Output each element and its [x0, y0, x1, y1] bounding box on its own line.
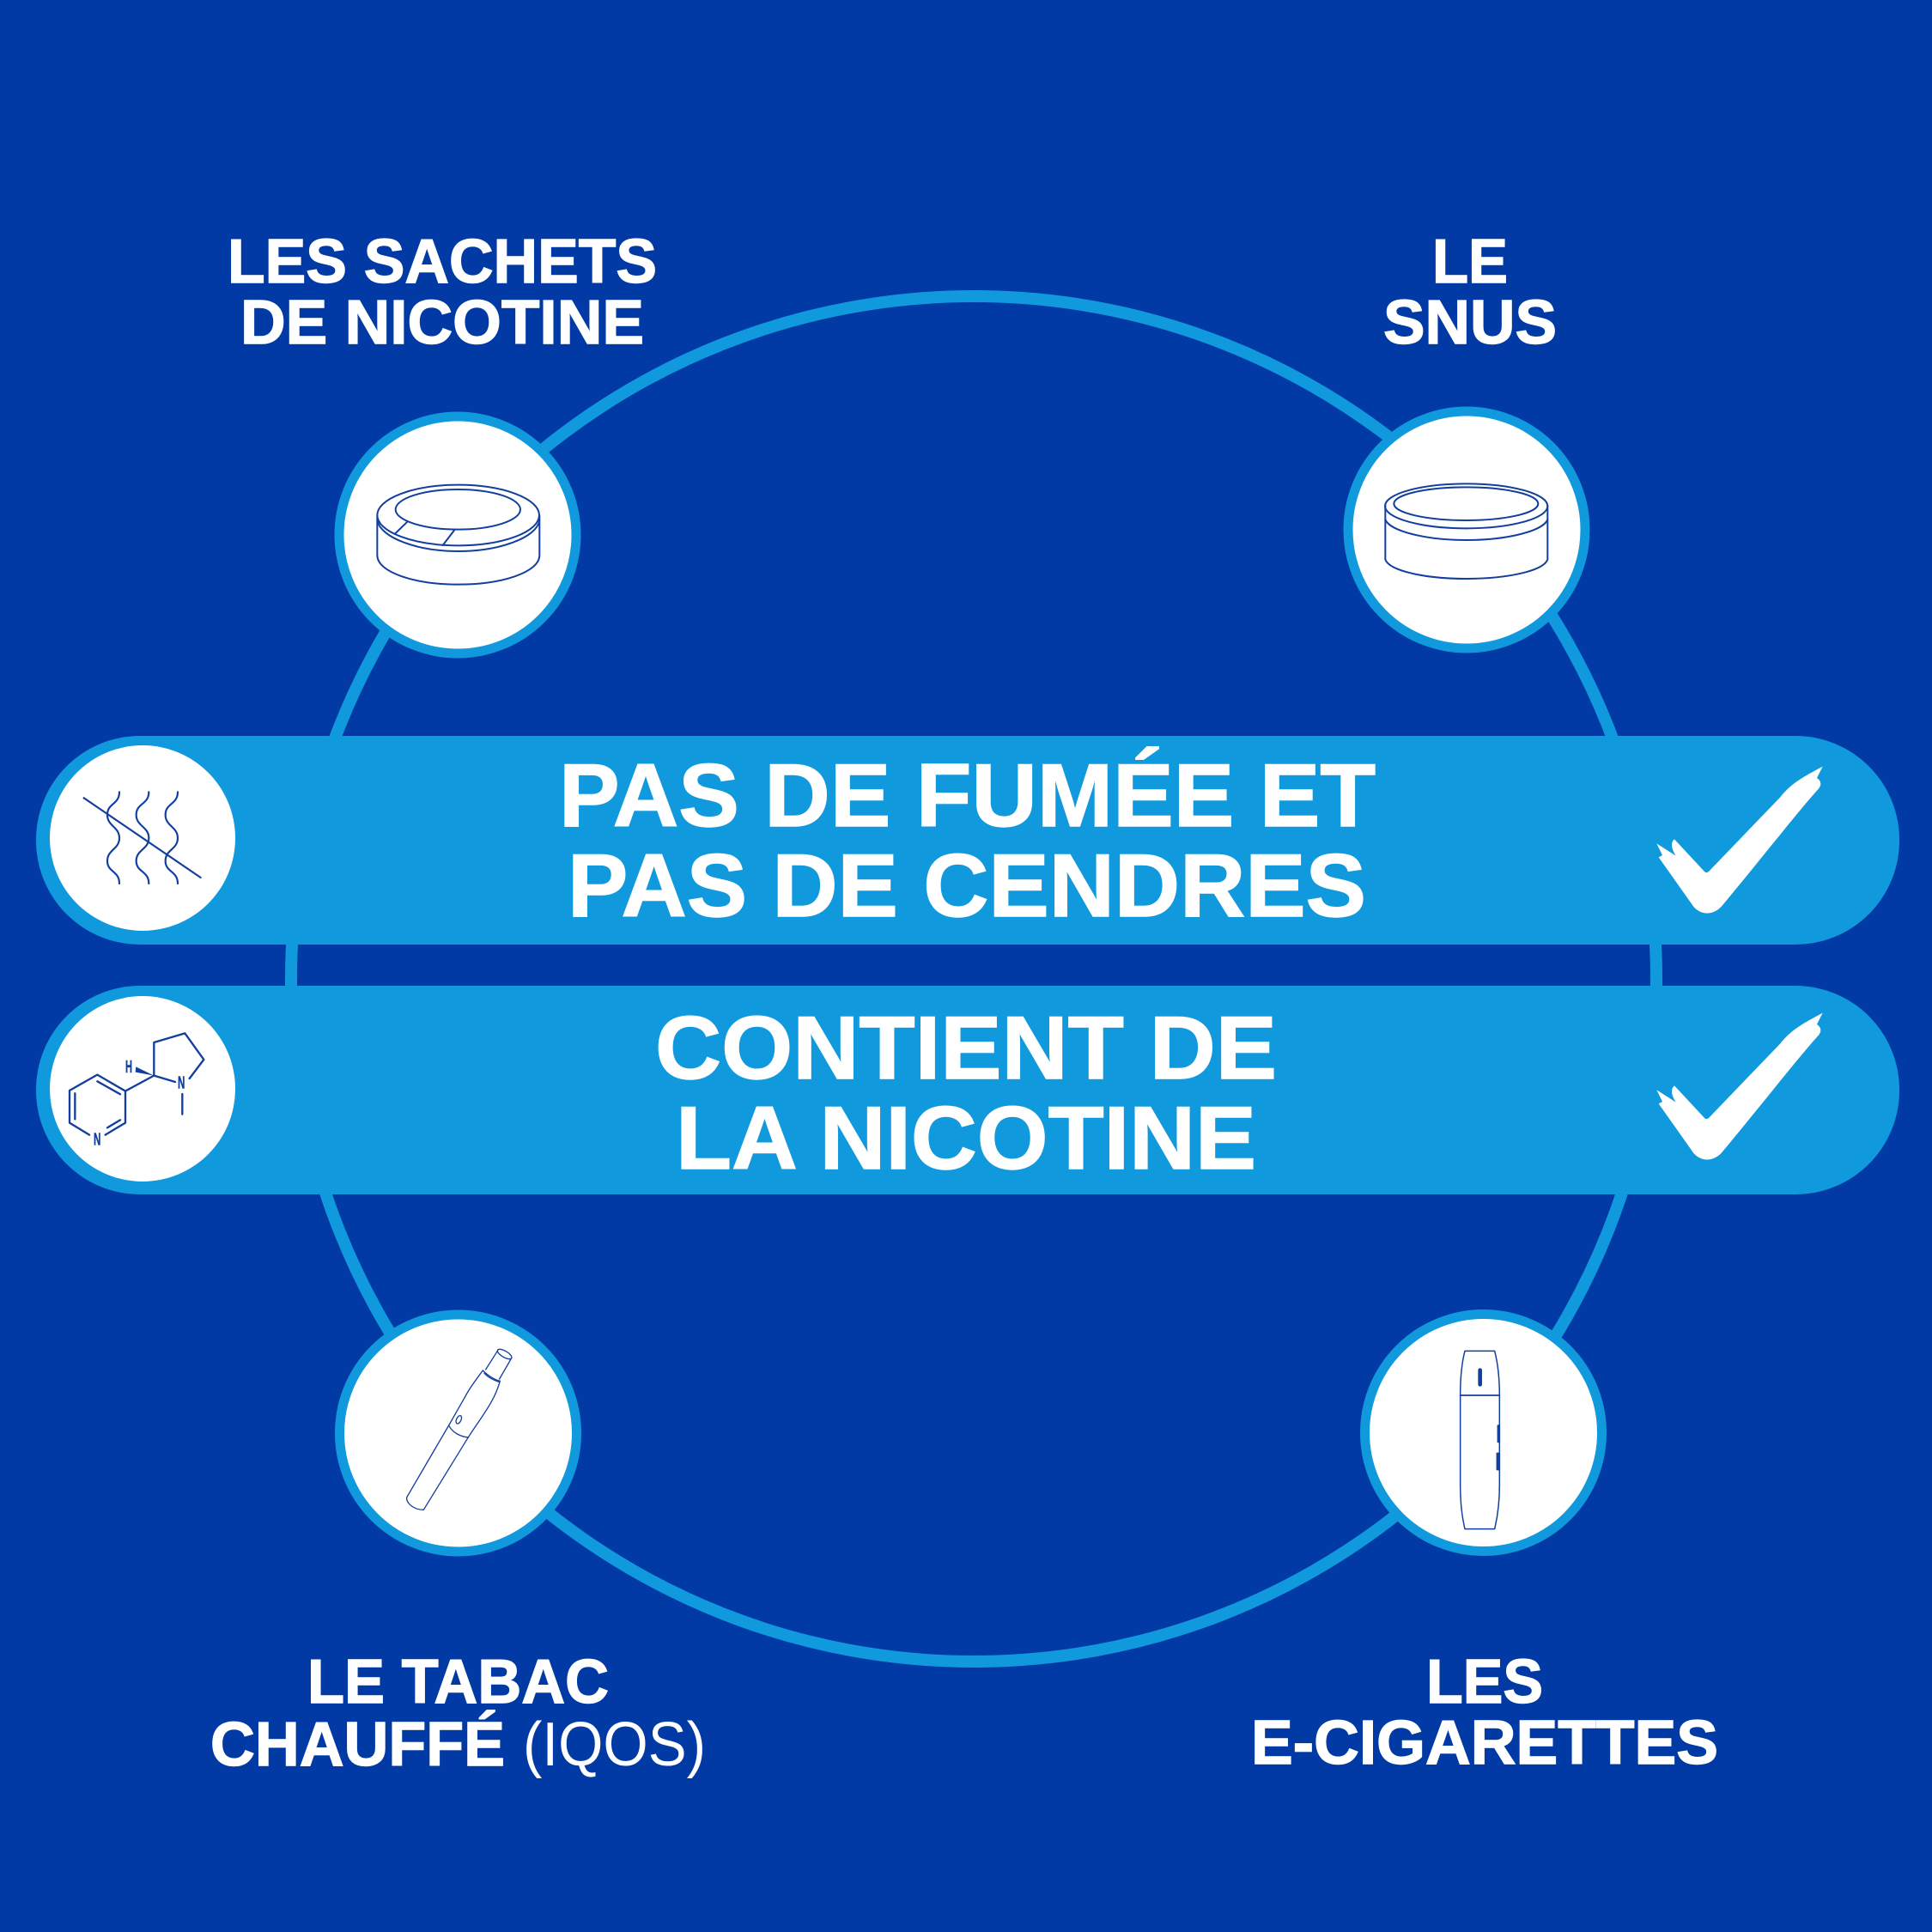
- icon: nicotine molecule: N: [178, 1074, 185, 1093]
- banner background: [36, 986, 1899, 1194]
- heading: les e-cigarettes: LES: [1426, 1648, 1543, 1716]
- icon: check mark: [1656, 1013, 1823, 1160]
- heading: contient de la nicotine: CONTIENT DE: [655, 999, 1277, 1098]
- icon: heated tobacco device: [340, 1315, 577, 1552]
- heading: les e-cigarettes: E-CIGARETTES: [1251, 1709, 1718, 1777]
- heading: le tabac chauffé (IQOS): LE TABAC: [307, 1648, 609, 1716]
- heading: pas de fumée et pas de cendres: PAS DE CENDRES: [568, 836, 1366, 936]
- panel: nicotine pouches: [228, 228, 657, 653]
- icon: crossed-out smoke: [50, 745, 235, 931]
- large connecting ring: [291, 296, 1656, 1662]
- heading: le snus: [1383, 228, 1557, 357]
- heading: le tabac chauffé (IQOS): (IQOS): [523, 1710, 706, 1779]
- banner background: [36, 736, 1899, 945]
- heading: les sachets de nicotine: LES SACHETS: [228, 228, 657, 296]
- heading: contient de la nicotine: [655, 999, 1277, 1188]
- heading: le snus: LE: [1432, 228, 1508, 296]
- icon: nicotine molecule: N: [94, 1130, 100, 1149]
- heading: les e-cigarettes: [1251, 1648, 1718, 1777]
- icon: nicotine molecule: H: [125, 1058, 132, 1077]
- icon: check mark: [1656, 767, 1823, 914]
- panel: contains nicotine banner: [36, 986, 1899, 1194]
- heading: le tabac chauffé (IQOS): CHAUFFÉ: [210, 1710, 505, 1779]
- panel: e-cigarettes: [1251, 1314, 1718, 1777]
- icon: e-cigarette device: [1365, 1314, 1602, 1551]
- heading: le tabac chauffé (IQOS): [210, 1648, 706, 1779]
- heading: le snus: SNUS: [1383, 289, 1557, 357]
- heading: pas de fumée et pas de cendres: [559, 746, 1376, 936]
- panel: no smoke no ash banner: [36, 736, 1899, 945]
- heading: pas de fumée et pas de cendres: PAS DE FUMÉE ET: [559, 746, 1376, 846]
- icon: nicotine pouch can: [339, 416, 576, 653]
- icon: snus can: [1348, 411, 1585, 648]
- panel: heated tobacco: [210, 1315, 706, 1779]
- icon: nicotine molecule: [50, 996, 235, 1182]
- heading: les sachets de nicotine: [228, 228, 657, 357]
- heading: contient de la nicotine: LA NICOTINE: [676, 1089, 1256, 1188]
- heading: les sachets de nicotine: DE NICOTINE: [240, 289, 644, 357]
- panel: snus: [1348, 228, 1585, 648]
